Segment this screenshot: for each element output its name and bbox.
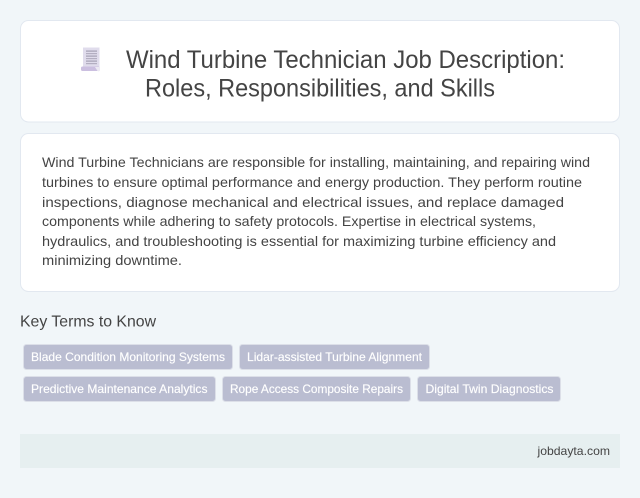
footer source: jobdayta.com (536, 444, 610, 458)
footer (20, 434, 620, 468)
tag: lidar alignment (240, 344, 430, 370)
footer bar (20, 434, 620, 468)
description card (20, 134, 620, 292)
tag: blade condition monitoring: Blade Condition Monitoring Systems (31, 350, 225, 364)
panel: key term tags (24, 344, 560, 402)
tag: rope access repairs: Rope Access Composite Repairs (230, 382, 403, 396)
description text: minimizing downtime. (42, 252, 182, 268)
description text: Wind Turbine Technicians are responsible for installing, maintaining, and repairing wind (42, 154, 590, 170)
title text (126, 46, 565, 102)
description text (42, 154, 590, 268)
title text: Roles, Responsibilities, and Skills (145, 74, 495, 102)
description text: hydraulics, and troubleshooting is essential for maximizing turbine efficiency and (42, 233, 556, 249)
description text: inspections, diagnose mechanical and electrical issues, and replace damaged (42, 194, 564, 210)
description text: components while adhering to safety protocols. Expertise in electrical systems, (42, 213, 536, 229)
tag: lidar alignment: Lidar-assisted Turbine Alignment (247, 350, 423, 364)
tag: blade condition monitoring (24, 344, 232, 370)
tag: digital twin (418, 376, 560, 402)
tag: predictive maintenance (24, 376, 216, 402)
heading: key terms: Key Terms to Know (20, 314, 156, 330)
icon: document receipt (81, 48, 100, 71)
panel: description (20, 134, 620, 292)
tag: rope access repairs (222, 376, 410, 402)
description text: turbines to ensure optimal performance and energy production. They perform routine (42, 174, 582, 190)
panel: title header (20, 20, 620, 122)
header card (20, 20, 620, 122)
tag: predictive maintenance: Predictive Maintenance Analytics (31, 382, 208, 396)
title text: Wind Turbine Technician Job Description: (126, 46, 565, 74)
tag: digital twin: Digital Twin Diagnostics (426, 382, 554, 396)
